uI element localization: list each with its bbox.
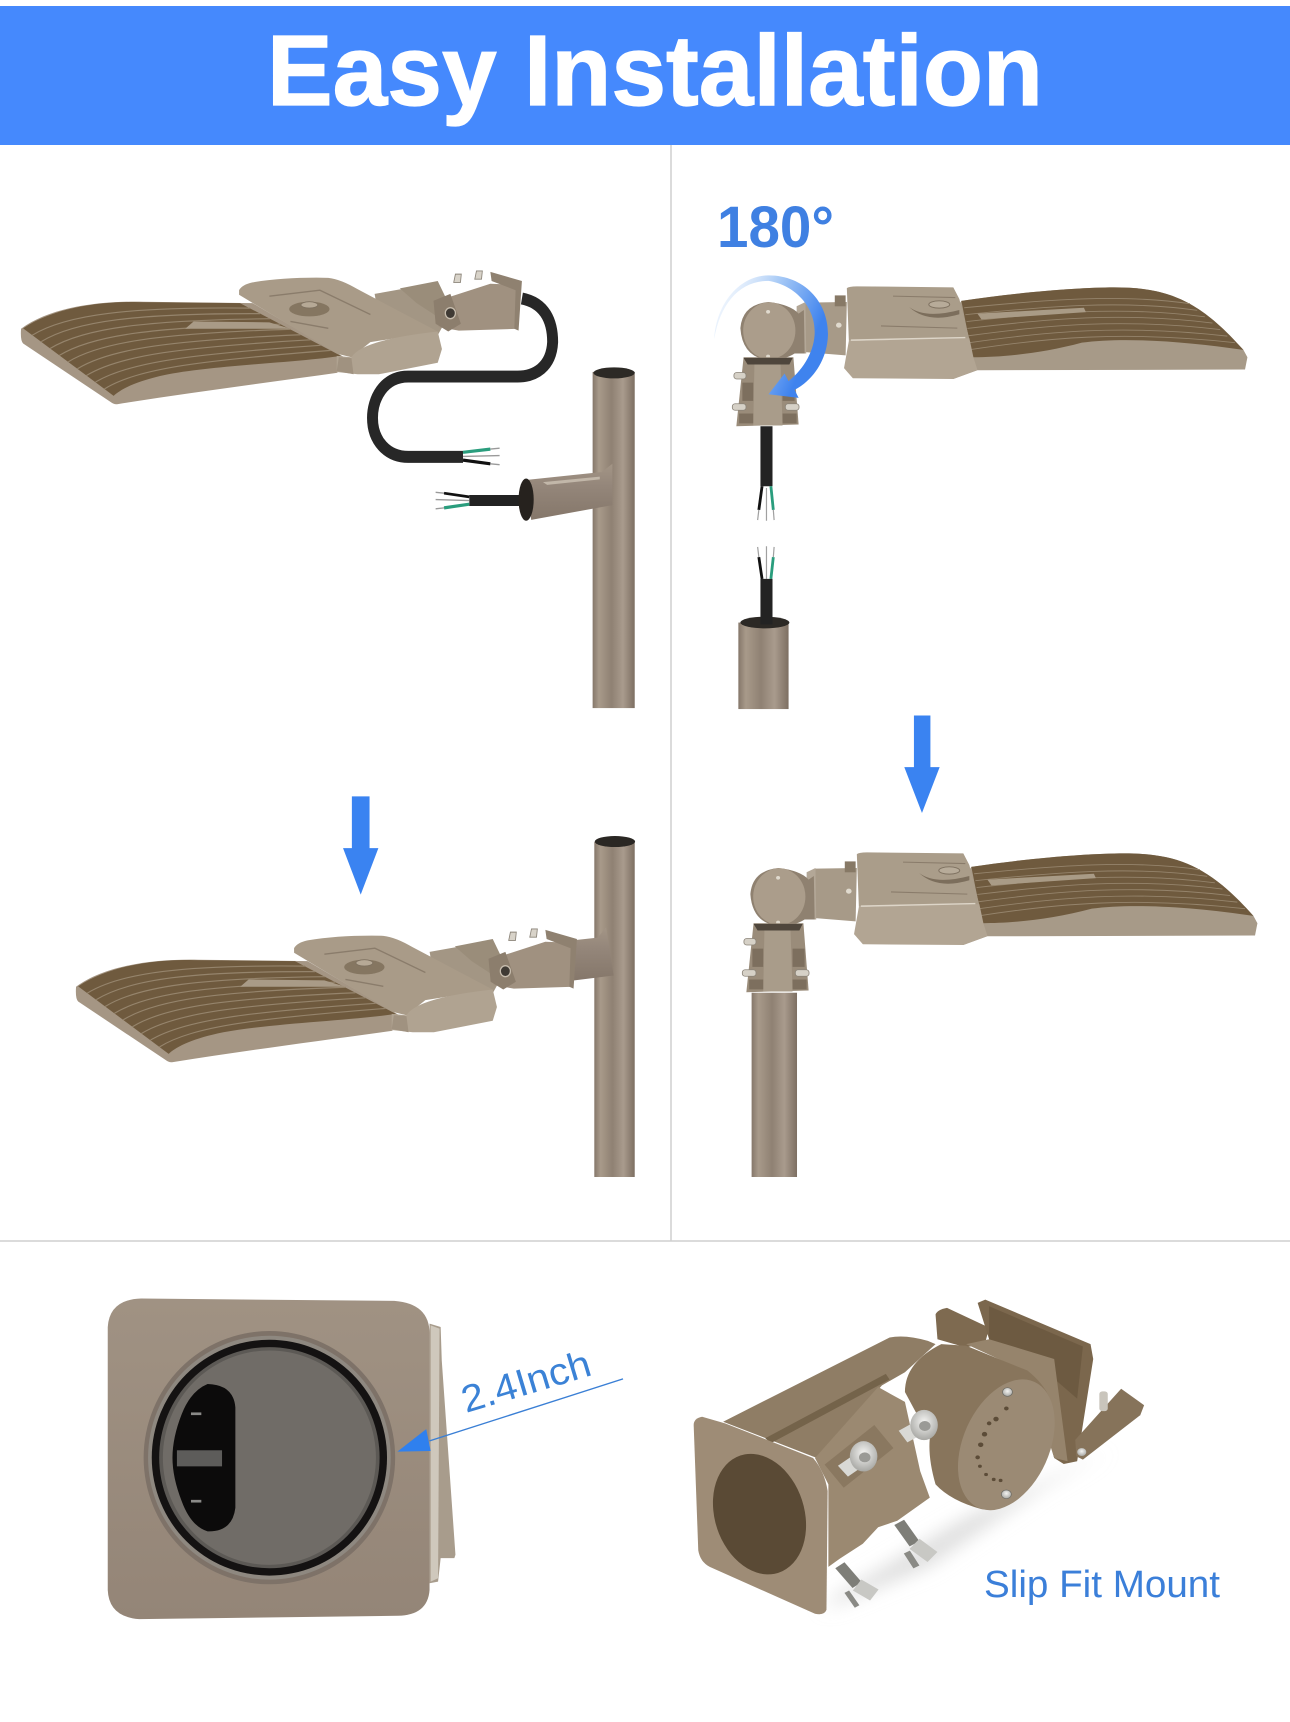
wires from the light [758, 426, 774, 521]
tenon pole with side arm [436, 367, 635, 708]
tenon pole [572, 836, 635, 1177]
label: 180 degrees: 180° [717, 195, 834, 260]
vertical pole [752, 993, 797, 1177]
title banner [0, 6, 1290, 145]
icon: 180 degree rotation arrow [714, 275, 828, 398]
panel: step 3 light mounted on side pole [76, 796, 635, 1177]
panel: step 2 rotate and wire vertical pole [714, 195, 1247, 709]
panel: slip fit mount [694, 1300, 1220, 1614]
mounted street light [742, 852, 1257, 992]
label: slip fit mount: Slip Fit Mount [984, 1564, 1220, 1606]
panel: step 1 wiring to side pole [21, 271, 635, 708]
pole top with wires [738, 546, 789, 709]
square mount end view [108, 1299, 455, 1619]
heading: Easy Installation: Easy Installation [267, 15, 1043, 127]
label: 2.4 inch: 2.4Inch [457, 1343, 596, 1422]
street light with mounting arm [21, 271, 522, 404]
street light with rotating mount [732, 286, 1247, 426]
panel: mount opening size [108, 1299, 623, 1619]
slip fit mount product view [694, 1300, 1144, 1614]
mounted street light [76, 929, 577, 1062]
dimension arrow [397, 1379, 623, 1452]
black power cable with wires [372, 298, 553, 465]
icon: down arrow [904, 715, 940, 813]
icon: down arrow [343, 796, 378, 895]
panel: step 4 light mounted on vertical pole [742, 715, 1257, 1177]
